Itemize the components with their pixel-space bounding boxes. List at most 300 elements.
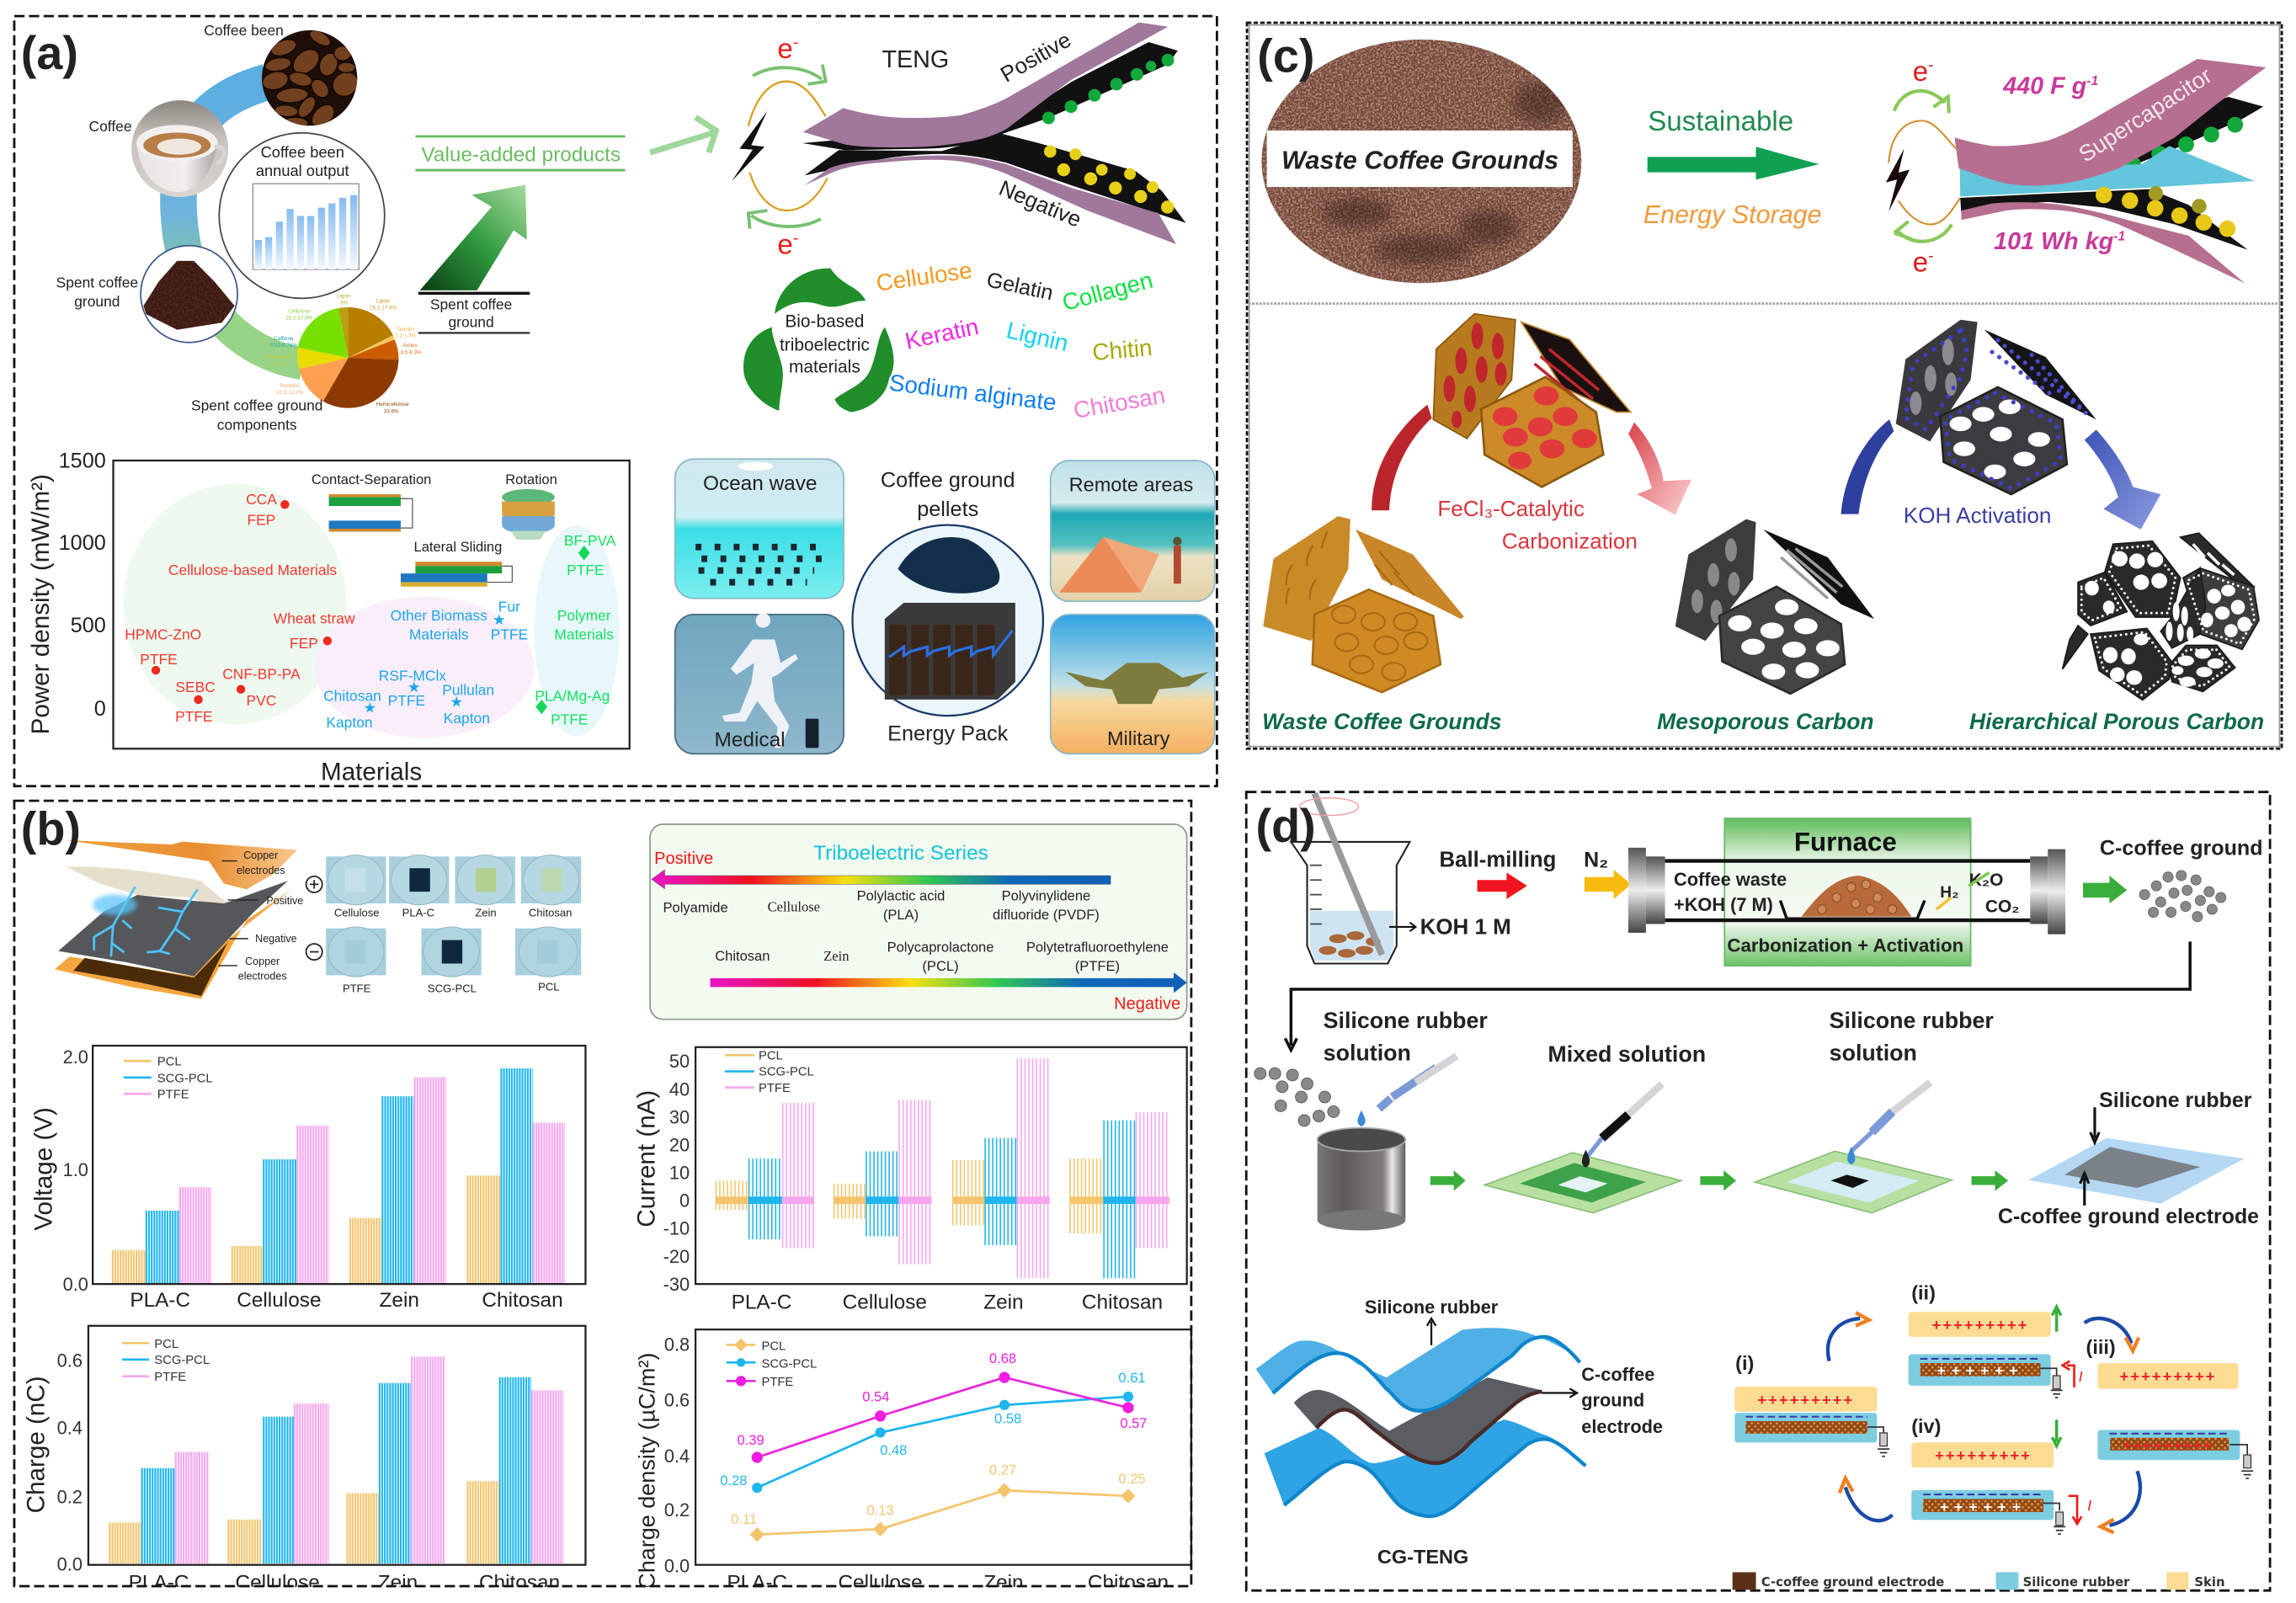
- icon: coffee cup photo: [131, 100, 228, 197]
- bio-based material names: [875, 257, 1167, 423]
- chart: charge: Charge (nC): [23, 1376, 51, 1513]
- triboelectric series box: Zein: [823, 948, 850, 964]
- chart: current: Zein: [983, 1291, 1024, 1314]
- supercapacitor schematic: 101 Wh kg: [1994, 228, 2113, 255]
- chart: power density vs materials: PTFE: [140, 651, 178, 668]
- chart: charge density: 0.2: [664, 1499, 690, 1520]
- sample photos negative row: PCL: [538, 981, 560, 993]
- electrode sheet: [1294, 1377, 1542, 1463]
- pie chart: spent coffee ground components: Tannins: [397, 327, 415, 333]
- TENG schematic: e: [777, 229, 793, 260]
- legend: [124, 1056, 213, 1102]
- value-added products label: Value-added products: [421, 144, 621, 167]
- triboelectric series box: [650, 824, 1187, 1020]
- TENG schematic: -: [793, 35, 798, 52]
- mask bottom cut: [0, 1587, 1225, 1603]
- arrow: to C-coffee ground: [2083, 876, 2127, 903]
- chart: charge density: 0.68: [989, 1350, 1016, 1366]
- chart: voltage: 1.0: [63, 1159, 88, 1180]
- chart: charge density: 0.4: [664, 1446, 690, 1467]
- chart: power density vs materials: PTFE: [175, 708, 213, 725]
- stage (iv): [1911, 1415, 2091, 1534]
- stage (i): [1734, 1352, 1889, 1457]
- legend: SCG-PCL: [759, 1066, 814, 1079]
- arrow: step 1 to 2: [1430, 1170, 1466, 1190]
- chart: charge density: 0.28: [720, 1473, 747, 1488]
- legend: SCG-PCL: [761, 1357, 817, 1371]
- sustainable energy storage arrow: Energy Storage: [1643, 200, 1822, 229]
- triboelectric series box: Positive: [654, 849, 713, 868]
- pie chart: spent coffee ground components: 15.2-17.9%: [285, 316, 313, 322]
- CG-TENG exploded view: Silicone rubber: [1365, 1297, 1499, 1318]
- supercapacitor schematic: e: [1913, 247, 1928, 278]
- card: coffee ground pellets energy pack: Energy Pack: [887, 722, 1009, 746]
- TENG device diagram: Copper: [245, 956, 280, 967]
- TENG schematic: -: [793, 230, 798, 248]
- triboelectric series box: Triboelectric Series: [813, 842, 988, 865]
- chart: current: [632, 1047, 1187, 1314]
- chart: power density vs materials: ★: [408, 679, 420, 695]
- bio-based material names: Keratin: [903, 313, 981, 354]
- supercapacitor schematic: -: [1928, 57, 1934, 75]
- legend: [1733, 1572, 2225, 1590]
- pie chart: spent coffee ground components: 33.6%: [384, 408, 399, 414]
- chart: charge: PLA-C: [129, 1571, 189, 1594]
- pie chart: spent coffee ground components: Hemicellulose: [376, 402, 409, 407]
- chart: power density vs materials: Kapton: [326, 714, 373, 731]
- stage (ii): (ii): [1911, 1281, 1936, 1303]
- label: KOH 1 M: KOH 1 M: [1420, 916, 1511, 940]
- sample photos negative row: PTFE: [343, 982, 371, 994]
- connector arrow: [1285, 941, 2190, 1050]
- panel: (b) triboelectric output: [0, 801, 1225, 1603]
- card: remote areas: [1051, 461, 1215, 601]
- legend: PCL: [157, 1056, 182, 1069]
- card: military: Military: [1107, 727, 1170, 749]
- triboelectric series box: Polycaprolactone: [887, 940, 994, 956]
- card: medical: Medical: [715, 729, 786, 752]
- chart: power density vs materials: 0: [94, 697, 106, 721]
- coffee bean annual output inset: annual output: [256, 162, 349, 179]
- icon: bio-based triboelectric recycle leaves: [743, 269, 893, 413]
- step 4: finished electrode: Silicone rubber: [2099, 1089, 2252, 1112]
- coffee bean annual output inset: Coffee been: [261, 143, 344, 161]
- heading (a): (a): [21, 27, 78, 79]
- chart: voltage: Zein: [380, 1289, 419, 1312]
- card: coffee ground pellets energy pack: Coffee ground: [881, 468, 1015, 492]
- chart: power density vs materials: CCA: [246, 491, 277, 508]
- chart: charge density: 0.11: [731, 1511, 757, 1527]
- chart: power density vs materials: Materials: [554, 626, 614, 643]
- waste coffee grounds photo: [1262, 40, 1581, 283]
- heading (d): (d): [1256, 800, 1316, 852]
- sample photos positive row: [306, 855, 581, 919]
- chart: charge density: PLA-C: [727, 1571, 787, 1594]
- legend: PTFE: [157, 1089, 189, 1102]
- TENG device diagram: electrodes: [238, 971, 287, 983]
- icon: bio-based triboelectric recycle leaves: materials: [789, 357, 860, 376]
- chart: charge density: Cellulose: [838, 1571, 923, 1594]
- chart: charge density: 0.61: [1118, 1370, 1146, 1386]
- stage (ii): I: [2079, 1368, 2083, 1385]
- CG-TENG exploded view: ground: [1581, 1390, 1644, 1411]
- ring labels: Spent coffee ground: [191, 397, 322, 414]
- chart: voltage: 2.0: [63, 1046, 88, 1068]
- arrow: growth from spent coffee ground: [418, 184, 530, 333]
- supercapacitor schematic: -1: [2113, 230, 2125, 244]
- chart: current: 40: [669, 1078, 690, 1100]
- pie chart: spent coffee ground components: Lignin: [337, 294, 351, 300]
- chart: charge: 0.6: [57, 1350, 83, 1371]
- bio-based material names: Lignin: [1004, 317, 1071, 356]
- chart: power density vs materials: CNF-BP-PA: [222, 666, 301, 683]
- arrow: to catalytic carbonization: [1372, 405, 1432, 510]
- TENG schematic: Negative: [995, 175, 1085, 232]
- arrow: to TENG: [650, 117, 716, 152]
- triboelectric series box: Polyvinylidene: [1002, 888, 1090, 904]
- stage (ii): [1909, 1281, 2083, 1398]
- step labels: solution: [1324, 1040, 1411, 1065]
- bio-based material names: Chitin: [1091, 334, 1153, 365]
- panel frame (b): [14, 801, 1191, 1586]
- chart: power density vs materials: 1500: [59, 450, 106, 473]
- card: military: [1051, 615, 1215, 754]
- icon: bio-based triboelectric recycle leaves: triboelectric: [780, 335, 870, 354]
- cluster: KOH activated: [1896, 320, 2096, 494]
- chart: power density vs materials: FEP: [248, 512, 275, 529]
- icon: beaker with rod: [1291, 793, 1409, 963]
- arrow: to KOH activation: [1841, 419, 1894, 514]
- triboelectric series box: (PCL): [922, 958, 959, 974]
- triboelectric series box: difluoride (PVDF): [993, 907, 1100, 923]
- arrow: step 2 to 3: [1700, 1170, 1736, 1190]
- upper silicone rubber sheet: [1256, 1328, 1580, 1411]
- card: coffee ground pellets energy pack: pellets: [917, 498, 978, 521]
- stage (iv): +++++++++: [1935, 1446, 2032, 1464]
- stage (iii): +++++++++: [2120, 1367, 2217, 1385]
- chart: charge density: 0.6: [664, 1390, 690, 1411]
- sustainable energy storage arrow: Sustainable: [1648, 106, 1793, 137]
- gradient arrow: positive: [652, 870, 1111, 889]
- arrow: step 3 to 4: [1972, 1170, 2008, 1190]
- TENG schematic: Positive: [996, 27, 1075, 88]
- chart: voltage: Cellulose: [237, 1289, 322, 1312]
- contact-separation modes: Lateral Sliding: [414, 539, 502, 555]
- TENG device diagram: Copper: [243, 849, 278, 861]
- ring labels: Coffee been: [204, 22, 284, 39]
- stage (ii): ++++++: [1937, 1362, 2023, 1379]
- pie chart: spent coffee ground components: 7.7%: [274, 361, 287, 367]
- chart: current: PLA-C: [732, 1291, 791, 1314]
- furnace: Carbonization + Activation: [1727, 935, 1963, 956]
- chart: charge: 0.4: [57, 1418, 83, 1439]
- stage (i): +++++++++: [1757, 1391, 1854, 1409]
- bio-based material names: Collagen: [1059, 267, 1156, 316]
- furnace: +KOH (7 M): [1674, 894, 1773, 915]
- chart: power density vs materials: SEBC: [175, 679, 216, 695]
- chart: current: -30: [663, 1274, 690, 1295]
- sample photos positive row: PLA-C: [402, 907, 434, 919]
- arrow: ball-milling: [1440, 849, 1556, 899]
- card: remote areas: Remote areas: [1069, 474, 1193, 496]
- card: medical: [675, 613, 844, 754]
- chart: charge density: 0.25: [1118, 1471, 1146, 1487]
- pie chart: spent coffee ground components: Proteins: [280, 383, 300, 389]
- supercapacitor schematic: e: [1913, 56, 1928, 88]
- CG-TENG exploded view: electrode: [1581, 1416, 1663, 1437]
- chart: charge density: 0.54: [862, 1388, 889, 1404]
- pie chart: spent coffee ground components: 0.02-0.76%: [270, 343, 297, 349]
- bio-based material names: Cellulose: [875, 257, 973, 296]
- legend: [727, 1339, 817, 1389]
- chart: charge density: 0.0: [664, 1555, 690, 1576]
- furnace: K₂O: [1969, 871, 2003, 890]
- chart: power density vs materials: Materials: [321, 759, 422, 786]
- step labels: solution: [1830, 1040, 1917, 1065]
- triboelectric series box: (PTFE): [1075, 958, 1120, 974]
- chart: power density vs materials: Power density (mW/m²): [27, 474, 55, 734]
- supercapacitor schematic: 440 F g: [2003, 72, 2086, 99]
- step labels: Silicone rubber: [1324, 1008, 1488, 1033]
- chart: current: 10: [669, 1163, 690, 1184]
- sample photos negative row: [306, 927, 581, 994]
- chart: power density vs materials: ★: [450, 694, 463, 711]
- step 4: finished electrode: [1998, 1089, 2259, 1228]
- contact-separation modes: [312, 471, 557, 587]
- sustainable energy storage arrow: [1643, 106, 1822, 229]
- ring labels: ground: [74, 293, 120, 310]
- chart: charge density: 0.58: [994, 1411, 1021, 1427]
- chart: charge density: 0.48: [880, 1442, 907, 1458]
- chart: power density vs materials: ★: [493, 611, 505, 628]
- chart: current: Cellulose: [843, 1291, 927, 1314]
- chart: charge density: [634, 1329, 1191, 1594]
- pie chart: spent coffee ground components: 1.2-1.5%: [395, 333, 417, 339]
- chart: voltage: Chitosan: [482, 1289, 563, 1312]
- TENG schematic: e: [777, 34, 793, 65]
- chart: current: 30: [669, 1106, 690, 1127]
- stage (ii): +++++++++: [1932, 1316, 2029, 1334]
- arrow: growth from spent coffee ground: ground: [448, 313, 494, 330]
- chart: voltage: Voltage (V): [29, 1107, 57, 1231]
- card: ocean wave: [675, 459, 844, 599]
- panel frame (a): [14, 16, 1217, 786]
- chart: current: -20: [663, 1246, 690, 1267]
- ring labels: components: [217, 416, 297, 433]
- supercapacitor schematic: Supercapacitor: [2075, 62, 2216, 168]
- legend: PCL: [154, 1338, 178, 1351]
- bio-based material names: Gelatin: [984, 268, 1055, 305]
- icon: bio-based triboelectric recycle leaves: Bio-based: [785, 312, 864, 331]
- sample photos positive row: Zein: [475, 907, 497, 919]
- card: ocean wave: Ocean wave: [703, 472, 817, 495]
- legend: PTFE: [154, 1371, 186, 1384]
- chart: charge density: 0.57: [1120, 1415, 1148, 1431]
- chart: power density vs materials: Kapton: [444, 710, 490, 727]
- chart: power density vs materials: Wheat straw: [274, 610, 355, 626]
- legend: Skin: [2194, 1575, 2225, 1590]
- triboelectric series box: Cellulose: [768, 899, 820, 915]
- cluster: waste coffee grounds: [1263, 516, 1464, 692]
- chart: voltage: PLA-C: [130, 1289, 190, 1312]
- chart: charge: [23, 1326, 585, 1594]
- pie chart: spent coffee ground components: [265, 294, 422, 414]
- furnace: CO₂: [1985, 897, 2020, 917]
- legend: SCG-PCL: [154, 1354, 210, 1367]
- TENG device diagram: [55, 840, 303, 999]
- icon: energy pack box: [885, 603, 1015, 700]
- TENG device diagram: Negative: [255, 933, 297, 945]
- C-coffee ground particles: [2100, 837, 2263, 922]
- chart: voltage: 0.0: [63, 1274, 88, 1295]
- pie chart: spent coffee ground components: 3%: [340, 300, 348, 306]
- bio-based material names: Chitosan: [1072, 381, 1167, 423]
- sample photos positive row: Chitosan: [529, 907, 572, 919]
- furnace: Furnace: [1794, 827, 1897, 856]
- icon: coffee beans photo: [262, 30, 357, 126]
- card: coffee ground pellets energy pack: [852, 468, 1043, 746]
- chart: charge density: 0.27: [989, 1462, 1016, 1478]
- caption: mesoporous carbon: Mesoporous Carbon: [1657, 709, 1874, 734]
- triboelectric series box: Negative: [1114, 994, 1180, 1013]
- chart: power density vs materials: Materials: [409, 626, 469, 643]
- stage (iv): ++++++: [1940, 1499, 2027, 1515]
- caption: hierarchical porous carbon: Hierarchical Porous Carbon: [1969, 709, 2264, 734]
- chart: charge density: 0.13: [866, 1502, 894, 1518]
- chart: power density vs materials: FEP: [290, 635, 318, 652]
- sample photos positive row: Cellulose: [334, 907, 380, 919]
- pie chart: spent coffee ground components: Cellulose: [288, 309, 311, 315]
- legend: SCG-PCL: [157, 1073, 213, 1086]
- arrow: to mesoporous carbon: [1628, 423, 1691, 514]
- step 3: silicone rubber board: [1755, 1083, 1952, 1213]
- chart: power density vs materials: Chitosan: [323, 688, 381, 705]
- heading (b): (b): [21, 802, 81, 855]
- ring labels: [56, 22, 322, 433]
- cycle arrows: [1828, 1313, 2140, 1532]
- pie chart: spent coffee ground components: Caffeine: [274, 336, 294, 342]
- panel: (c) waste coffee grounds supercapacitor: [1247, 23, 2282, 748]
- label: FeCl3-catalytic carbonization: Carbonization: [1502, 529, 1638, 554]
- coffee bean annual output inset: [219, 133, 385, 298]
- chart: charge: Chitosan: [479, 1571, 560, 1594]
- panel: (a) spent coffee ground TENG: [14, 16, 1217, 786]
- CG-TENG exploded view: [1256, 1297, 1663, 1568]
- chart: current: 20: [669, 1134, 690, 1155]
- panel frame (c): [1247, 23, 2282, 748]
- legend: PTFE: [761, 1376, 793, 1389]
- icon: crucible with coffee: [1780, 876, 1925, 919]
- value-added products label: [415, 136, 625, 170]
- cluster: hierarchical porous carbon: [2063, 533, 2259, 700]
- furnace: Coffee waste: [1674, 869, 1787, 890]
- icon: pellets: [898, 537, 999, 594]
- sample photos negative row: SCG-PCL: [428, 982, 477, 994]
- chart: charge density: Zein: [983, 1571, 1024, 1594]
- label: KOH activation: KOH Activation: [1904, 503, 2051, 528]
- legend: PCL: [759, 1050, 783, 1063]
- chart: power density vs materials: 1000: [59, 531, 106, 555]
- furnace: H₂: [1940, 884, 1959, 902]
- ring labels: Spent coffee: [56, 274, 138, 290]
- bio-based material names: Sodium alginate: [887, 370, 1057, 416]
- legend: [725, 1050, 814, 1095]
- label: FeCl3-catalytic carbonization: [1437, 496, 1638, 554]
- step 2: mixed solution board: [1484, 1084, 1681, 1213]
- supercapacitor schematic: [1886, 56, 2266, 284]
- CG-TENG exploded view: CG-TENG: [1377, 1546, 1468, 1568]
- panel frame (d): [1246, 792, 2270, 1590]
- chart: current: -10: [663, 1218, 690, 1239]
- arrow: to hierarchical porous carbon: [2085, 429, 2160, 530]
- panel: (d) CG-TENG fabrication: [1246, 792, 2270, 1590]
- TENG device diagram: electrodes: [237, 865, 285, 876]
- chart: charge density: Charge density (µC/m²): [634, 1353, 659, 1590]
- chart: power density vs materials: Other Biomass: [391, 607, 487, 624]
- furnace: [1628, 818, 2065, 966]
- chart: charge: 0.0: [57, 1554, 83, 1575]
- chart: charge: Cellulose: [235, 1571, 320, 1594]
- arrow: N2 inlet: N₂: [1584, 849, 1608, 872]
- cluster: mesoporous carbon: [1675, 519, 1874, 694]
- triboelectric series box: Chitosan: [715, 948, 770, 964]
- supercapacitor schematic: -: [1928, 248, 1934, 265]
- working mechanism stages: [1734, 1281, 2253, 1534]
- TENG schematic: TENG: [882, 46, 949, 73]
- pie chart: spent coffee ground components: 4.5-6.3%: [401, 350, 422, 356]
- cluster: FeCl3 catalysed: [1433, 314, 1631, 487]
- chart: power density vs materials: PTFE: [551, 711, 589, 728]
- chart: power density vs materials: 500: [71, 614, 106, 637]
- chart: power density vs materials: PVC: [247, 692, 276, 709]
- arrow: growth from spent coffee ground: Spent coffee: [430, 296, 512, 313]
- triboelectric series box: Polylactic acid: [857, 888, 945, 904]
- TENG schematic: [732, 23, 1185, 260]
- chart: power density vs materials: PTFE: [491, 626, 528, 643]
- chart: voltage: [29, 1046, 585, 1312]
- stage (iii): [2086, 1336, 2253, 1478]
- chart: power density vs materials: Fur: [498, 598, 520, 615]
- pie chart: spent coffee ground components: Melanoidins: [265, 354, 294, 360]
- chart: power density vs materials: Cellulose-based Materials: [168, 562, 337, 578]
- chart: current: 0: [679, 1190, 690, 1212]
- chart: power density vs materials: ★: [364, 700, 376, 716]
- lower silicone rubber sheet: [1265, 1419, 1585, 1516]
- heading (c): (c): [1257, 29, 1314, 82]
- legend: PTFE: [759, 1082, 791, 1095]
- chart: power density vs materials: PTFE: [567, 562, 605, 578]
- CG-TENG exploded view: C-coffee: [1581, 1364, 1654, 1385]
- stage (iii): +++++++++: [2123, 1437, 2213, 1454]
- chart: current: 50: [669, 1051, 690, 1072]
- step labels: [1324, 1008, 1994, 1067]
- supercapacitor schematic: -1: [2086, 74, 2098, 88]
- gradient arrow: negative: [711, 972, 1187, 993]
- chart: power density vs materials: HPMC-ZnO: [125, 626, 201, 643]
- chart: charge density: Chitosan: [1088, 1571, 1169, 1594]
- arrow: N2 inlet: [1584, 849, 1631, 899]
- legend: [122, 1338, 210, 1384]
- step 1: cup with particles and syringe: [1255, 1056, 1457, 1231]
- triboelectric series box: (PLA): [883, 907, 919, 923]
- triboelectric series box: Polyamide: [663, 900, 728, 916]
- contact-separation modes: Rotation: [505, 471, 557, 487]
- legend: C-coffee ground electrode: [1761, 1575, 1944, 1590]
- chart: charge: Zein: [378, 1571, 418, 1594]
- arrow: ball-milling: Ball-milling: [1440, 849, 1556, 872]
- stage (iv): (iv): [1911, 1415, 1941, 1437]
- step labels: Mixed solution: [1548, 1041, 1706, 1067]
